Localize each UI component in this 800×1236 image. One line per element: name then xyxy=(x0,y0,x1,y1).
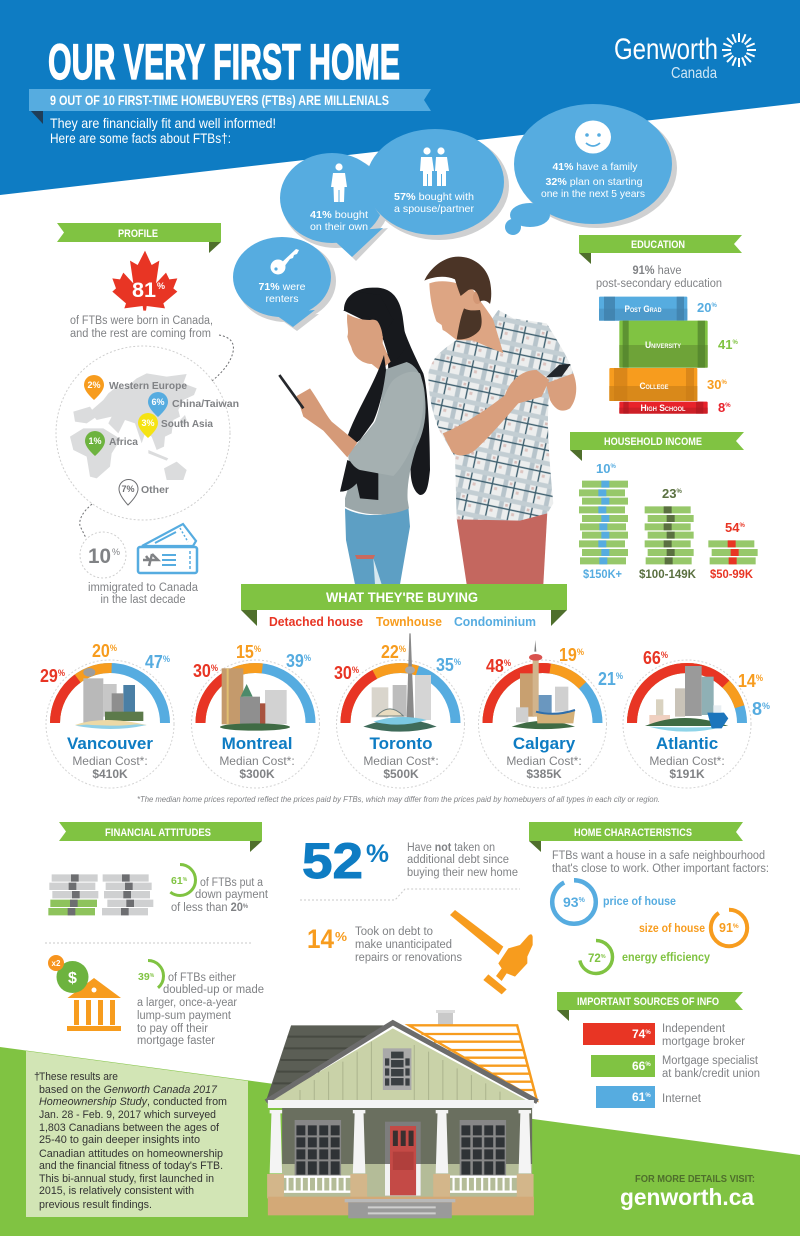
values: income percentages: 10 xyxy=(596,461,610,476)
ring: size of house 91%: % xyxy=(733,923,739,930)
bar: mortgage broker 74%: mortgage broker xyxy=(662,1036,745,1048)
bubble: renters: 71% were xyxy=(258,281,306,293)
gauge: Montreal: 30 xyxy=(193,661,213,681)
values: education percentages: % xyxy=(721,380,727,386)
gauge: Montreal xyxy=(192,642,320,788)
stat: 14% took on debt: repairs or renovations xyxy=(355,952,462,964)
ribbon: sources of info xyxy=(557,992,743,1021)
text: important factors: that's close to work. Other important factors: xyxy=(552,863,769,875)
gauge: Toronto: 22 xyxy=(381,642,401,662)
bubble: family: one in the next 5 years xyxy=(541,188,645,200)
panel: important sources of info xyxy=(557,992,760,1108)
door xyxy=(385,1122,421,1196)
gauge: Calgary: 19 xyxy=(559,645,579,665)
panel: study note: previous result findings. xyxy=(39,1199,152,1211)
bar: mortgage broker 74%: Independent xyxy=(662,1023,726,1035)
bubble: bought with a spouse: a spouse/partner xyxy=(394,203,474,215)
illustration: house xyxy=(266,1023,537,1218)
gauge: Atlantic: % xyxy=(762,701,770,711)
stat: 52% no additional debt: 52 xyxy=(302,833,363,889)
pin: Other: 7% xyxy=(121,484,135,494)
gauge: Calgary: 48 xyxy=(486,656,506,676)
intro text: They are financially fit and well informed! xyxy=(50,115,276,131)
illustration: Vancouver skyline xyxy=(75,668,147,729)
bubble: bought with a spouse xyxy=(366,129,509,240)
panel: home characteristics xyxy=(529,822,769,974)
pin: South Asia: 3% xyxy=(141,418,155,428)
bubble: family xyxy=(505,104,677,235)
gauge: Calgary: % xyxy=(577,647,584,657)
gauge: Atlantic: 66 xyxy=(643,648,663,668)
stat: 10% immigrated: 10 xyxy=(88,545,111,568)
gauge: Montreal: Montreal xyxy=(222,734,292,753)
gauge: Atlantic: % xyxy=(661,650,668,660)
panel: study note: Jan. 28 - Feb. 9, 2017 which surveyed xyxy=(39,1109,216,1121)
bubble: renters xyxy=(233,237,336,331)
gable xyxy=(266,1023,537,1103)
pin: China/Taiwan xyxy=(148,392,239,417)
values: education percentages: 20 xyxy=(697,300,711,315)
pin: Other xyxy=(119,480,169,505)
panel: debt xyxy=(300,833,533,994)
stat: 39% lump sum: mortgage faster xyxy=(137,1035,215,1047)
stat: 14% took on debt: make unanticipated xyxy=(355,939,452,951)
text: 91% post-secondary: 91% have xyxy=(632,265,682,277)
ring: energy efficiency 72%: energy efficiency xyxy=(622,952,711,964)
speech bubbles group xyxy=(233,104,677,331)
call to action: genworth.ca xyxy=(620,1184,754,1210)
stat: 39% lump sum: a larger, once-a-year xyxy=(137,997,237,1009)
logo: Genworth Canada xyxy=(614,33,756,82)
icon: baby face xyxy=(575,120,611,154)
woman xyxy=(279,288,430,584)
panel: study note: Homeownership Study, conducted from xyxy=(39,1096,227,1108)
panel: financial attitudes xyxy=(45,822,269,1047)
gauge: Vancouver: 47 xyxy=(145,652,165,672)
ribbon: profile: PROFILE xyxy=(118,228,158,240)
bar: internet 61%: 61 xyxy=(632,1090,645,1104)
panel: study note: † xyxy=(34,1071,40,1083)
stat: 14% took on debt: Took on debt to xyxy=(355,926,433,938)
bubble: bought on their own: 41% bought xyxy=(310,209,368,221)
ring: price of house 93%: 93 xyxy=(563,894,579,910)
man xyxy=(424,257,576,584)
banner: millennials xyxy=(29,89,431,124)
panel: study note: This bi-annual study, first launched in xyxy=(39,1173,214,1185)
text: important factors xyxy=(552,850,769,875)
illustration: chimney xyxy=(436,1010,455,1026)
panel: study note: 25-40 to gain deeper insights into xyxy=(39,1134,200,1146)
bar: internet 61% xyxy=(596,1086,702,1108)
bar: mortgage broker 74% xyxy=(583,1023,745,1048)
values: education percentages: % xyxy=(732,340,738,346)
illustration: Montreal skyline xyxy=(220,668,290,731)
title: OUR VERY FIRST HOME xyxy=(48,34,400,90)
panel: study note: based on the Genworth Canada 2017 xyxy=(39,1084,218,1096)
pin: Western Europe: Western Europe xyxy=(109,380,187,392)
world map xyxy=(70,373,197,480)
chart: stacked books xyxy=(599,297,708,414)
panel: study note: and the financial fitness of today's FTB. xyxy=(39,1160,223,1172)
stat: 52% no additional debt: buying their new home xyxy=(407,867,518,879)
bubble: bought with a spouse: 57% bought with xyxy=(394,191,474,203)
bar: internet 61%: % xyxy=(645,1093,651,1099)
bar: mortgage broker 74%: % xyxy=(645,1030,651,1036)
stat: 39% lump sum: lump-sum payment xyxy=(137,1010,232,1022)
chart: money stacks xyxy=(579,481,758,564)
labels: book levels: High School xyxy=(640,403,686,413)
icon: maple leaf 81% xyxy=(112,251,177,311)
values: income percentages: % xyxy=(676,489,682,495)
pin: South Asia xyxy=(138,413,213,438)
labels: income ranges: $150K+ xyxy=(583,567,622,581)
gauge: Toronto: Median Cost*: xyxy=(363,754,439,768)
pin: South Asia: South Asia xyxy=(161,418,213,430)
gauge: Toronto: % xyxy=(399,644,406,654)
illustration: Calgary skyline xyxy=(512,640,575,729)
bubble: renters: renters xyxy=(266,293,298,305)
ribbon: financial attitudes xyxy=(59,822,262,852)
icon: bank with coin: x2 xyxy=(52,959,61,968)
green footer band xyxy=(0,1047,800,1236)
gauge: Montreal: $300K xyxy=(239,767,275,781)
values: income percentages: 23 xyxy=(662,486,676,501)
stat: 61% down payment: of FTBs put a xyxy=(200,877,264,889)
heading ribbon: what they're buying: WHAT THEY'RE BUYING xyxy=(326,589,478,605)
ribbon: sources of info: IMPORTANT SOURCES OF INFO xyxy=(577,996,719,1008)
gauge: Atlantic: Atlantic xyxy=(656,734,718,753)
gauge: Calgary: $385K xyxy=(526,767,562,781)
stat: 14% took on debt: % xyxy=(335,929,347,944)
stat: 14% took on debt: 14 xyxy=(307,924,334,954)
text: 91% post-secondary xyxy=(596,265,722,290)
bar: mortgage specialist 66%: at bank/credit union xyxy=(662,1068,760,1080)
stat: 39% lump sum: to pay off their xyxy=(137,1023,208,1035)
icon: maple leaf 81%: % xyxy=(157,281,165,291)
stat: 39% lump sum: 39 xyxy=(138,971,150,983)
gauge: Montreal: 15 xyxy=(236,642,256,662)
labels: income ranges: $50-99K xyxy=(710,567,753,581)
gauge: Calgary xyxy=(478,640,623,788)
gauge: Atlantic: 14 xyxy=(738,671,758,691)
gauge: Vancouver: 20 xyxy=(92,641,112,661)
gauge: Montreal: % xyxy=(304,653,311,663)
right roof: wireframe xyxy=(409,1025,537,1100)
ribbon: home characteristics xyxy=(529,822,743,852)
labels: book levels xyxy=(624,304,686,413)
stat: 39% lump sum: % xyxy=(150,973,155,979)
heading ribbon: what they're buying xyxy=(241,584,567,626)
values: income percentages: 54 xyxy=(725,520,739,535)
stat: 61% down payment: down payment xyxy=(195,889,269,901)
text: important factors: FTBs want a house in a safe neighbourhood xyxy=(552,850,765,862)
illustration: Atlantic skyline xyxy=(645,666,728,732)
blue header band xyxy=(0,0,800,195)
gauge: Vancouver: % xyxy=(163,654,170,664)
gauge: Vancouver: % xyxy=(58,668,65,678)
intro text: Here are some facts about FTBs†: xyxy=(50,130,231,146)
call to action: FOR MORE DETAILS VISIT: xyxy=(635,1174,755,1185)
panel: study note: Canadian attitudes on homeownership xyxy=(39,1148,223,1160)
ribbon: profile xyxy=(57,223,221,253)
ribbon: financial attitudes: FINANCIAL ATTITUDES xyxy=(105,827,211,839)
bubble: family: 41% have a family xyxy=(552,161,638,173)
gauge: Vancouver: 29 xyxy=(40,666,60,686)
gauge: Atlantic: $191K xyxy=(669,767,705,781)
pin: China/Taiwan: 6% xyxy=(151,397,165,407)
gauge: Atlantic xyxy=(623,648,770,788)
pin: China/Taiwan: China/Taiwan xyxy=(172,398,239,410)
stat: 10% immigrated xyxy=(80,524,199,606)
icon: hammer xyxy=(450,910,533,994)
ring: size of house 91% xyxy=(639,910,747,946)
gauge: Toronto: 35 xyxy=(436,655,456,675)
ribbon: household income xyxy=(570,432,744,461)
panel: study note: 1,803 Canadians between the ages of xyxy=(39,1122,220,1134)
stat: 61% down payment: 61 xyxy=(171,875,183,887)
labels: book levels: College xyxy=(640,381,668,391)
ribbon: home characteristics: HOME CHARACTERISTICS xyxy=(574,827,692,839)
pin: Western Europe xyxy=(84,375,187,400)
gauge: Montreal: Median Cost*: xyxy=(219,754,295,768)
stat: 61% down payment: % xyxy=(183,877,188,883)
bar: mortgage specialist 66%: % xyxy=(645,1062,651,1068)
gauge: Toronto: $500K xyxy=(383,767,419,781)
gauge: Toronto: 30 xyxy=(334,663,354,683)
values: income percentages: % xyxy=(739,523,745,529)
legend: home types: Condominium xyxy=(454,614,536,629)
values: education percentages: 8 xyxy=(718,400,725,415)
panel: education xyxy=(579,235,742,415)
stat: 52% no additional debt: Have not taken on xyxy=(407,842,495,854)
labels: book levels: University xyxy=(645,340,681,350)
ring: price of house 93%: % xyxy=(579,897,586,904)
stat: 39% lump sum: doubled-up or made xyxy=(163,984,264,996)
gauge: Calgary: Median Cost*: xyxy=(506,754,582,768)
beam xyxy=(268,1100,534,1108)
banner: millennials: 9 OUT OF 10 FIRST-TIME HOMEBUYERS (FTBs) ARE MILLENIALS xyxy=(50,92,389,108)
stat: 10% immigrated: immigrated to Canada xyxy=(88,582,199,594)
stat: 14% took on debt xyxy=(307,924,462,964)
values: education percentages: % xyxy=(711,303,717,309)
pin: Africa: Africa xyxy=(109,436,138,448)
stat: 52% no additional debt xyxy=(302,833,518,889)
columns xyxy=(267,1110,534,1198)
icon: plane tickets xyxy=(138,524,197,573)
gauge: Toronto: % xyxy=(454,657,461,667)
values: income percentages: % xyxy=(610,464,616,470)
ribbon: education: EDUCATION xyxy=(631,239,685,251)
icon: money stacks down payment xyxy=(48,874,153,915)
bubble: bought on their own xyxy=(280,153,390,261)
stat: 39% lump sum xyxy=(132,960,264,1047)
bubble: family: 32% plan on starting xyxy=(546,176,643,188)
values: education percentages: % xyxy=(725,403,731,409)
icon: bank with coin: $ xyxy=(68,970,77,987)
ribbon: household income: HOUSEHOLD INCOME xyxy=(604,436,702,448)
values: income percentages xyxy=(596,461,745,535)
stat: 52% no additional debt: additional debt since xyxy=(407,854,509,866)
stat: 52% no additional debt: % xyxy=(366,840,389,868)
ring: size of house 91%: size of house xyxy=(639,923,705,935)
icon: maple leaf 81%: 81 xyxy=(132,279,156,302)
intro text xyxy=(50,115,276,146)
panel: study note xyxy=(26,1051,248,1217)
railings xyxy=(284,1177,518,1192)
legend: home types: Townhouse xyxy=(376,614,442,629)
porch wall xyxy=(282,1107,532,1199)
bar: mortgage specialist 66%: Mortgage specialist xyxy=(662,1055,759,1067)
icon: key xyxy=(270,249,299,274)
ring: price of house 93%: price of house xyxy=(603,896,676,908)
bar: mortgage broker 74%: 74 xyxy=(632,1027,645,1041)
gauge: Montreal: % xyxy=(254,644,261,654)
gauge: Vancouver: Median Cost*: xyxy=(72,754,148,768)
stat: 10% immigrated: in the last decade xyxy=(100,594,186,606)
gauge: Atlantic: % xyxy=(756,673,763,683)
labels: book levels: Post Grad xyxy=(624,304,662,314)
stat: 39% lump sum: of FTBs either xyxy=(168,972,236,984)
stat: 61% down payment xyxy=(164,864,269,914)
bar: mortgage specialist 66%: 66 xyxy=(632,1059,645,1073)
stat: 61% down payment: of less than 20 xyxy=(171,902,243,914)
legend: home types xyxy=(269,614,536,629)
gauge: Toronto xyxy=(334,633,464,788)
panel: profile xyxy=(56,223,239,606)
gauge: Atlantic: Median Cost*: xyxy=(649,754,725,768)
gauge: Toronto: Toronto xyxy=(370,734,432,753)
stat: 61% down payment: % xyxy=(243,904,249,910)
bar: mortgage specialist 66% xyxy=(591,1055,760,1080)
gauge: Vancouver xyxy=(40,641,174,788)
ribbon: education xyxy=(579,235,742,264)
illustration: Toronto skyline xyxy=(363,633,437,732)
values: education percentages: 41 xyxy=(718,337,732,352)
values: education percentages xyxy=(697,300,738,415)
foundation xyxy=(268,1197,534,1215)
gauge: Calgary: % xyxy=(616,671,623,681)
gauge: Toronto: % xyxy=(352,665,359,675)
gauge: Montreal: 39 xyxy=(286,651,306,671)
text: born in Canada: and the rest are coming from xyxy=(70,328,211,340)
logo: Genworth Canada: Genworth xyxy=(614,33,718,66)
gauge: Vancouver: % xyxy=(110,643,117,653)
footnote: median price: *The median home prices reported reflect the prices paid by FTBs, which may differ from the prices paid by homebuyers of all types in each city or region. xyxy=(137,794,660,804)
text: born in Canada: of FTBs were born in Canada, xyxy=(70,315,213,327)
pin: Africa: 1% xyxy=(88,436,102,446)
panel: study note: 2015, is relatively consistent with xyxy=(39,1185,194,1197)
left roof xyxy=(266,1025,384,1101)
pin: Africa xyxy=(85,431,138,456)
panel: household income xyxy=(570,432,758,581)
labels: income ranges: $100-149K xyxy=(639,567,696,581)
ring: energy efficiency 72% xyxy=(580,940,711,974)
logo: Genworth Canada: Canada xyxy=(671,65,717,82)
photo: woman and man on phones xyxy=(279,257,576,584)
front steps xyxy=(345,1199,455,1218)
gauge: Atlantic: 8 xyxy=(752,699,762,719)
bubble: bought on their own: on their own xyxy=(310,221,368,233)
ring: price of house 93% xyxy=(552,880,676,924)
legend: home types: Detached house xyxy=(269,614,363,629)
labels: income ranges xyxy=(583,567,753,581)
panel: study note: These results are xyxy=(39,1071,118,1083)
stat: 10% immigrated: % xyxy=(112,547,120,557)
ring: energy efficiency 72%: % xyxy=(601,954,606,960)
text: born in Canada xyxy=(70,315,213,340)
gauge: Montreal: % xyxy=(211,663,218,673)
gauge: Calgary: 21 xyxy=(598,669,618,689)
gauge: Calgary: Calgary xyxy=(513,734,576,753)
pin: Western Europe: 2% xyxy=(87,380,101,390)
gauge: Calgary: % xyxy=(504,658,511,668)
icon: bank with coin xyxy=(48,955,121,1031)
pin: Other: Other xyxy=(141,484,169,496)
ring: size of house 91%: 91 xyxy=(719,921,733,935)
text: 91% post-secondary: post-secondary education xyxy=(596,278,722,290)
bar: internet 61%: Internet xyxy=(662,1093,702,1105)
gauge: Vancouver: Vancouver xyxy=(67,734,153,753)
gauge: Vancouver: $410K xyxy=(92,767,128,781)
values: education percentages: 30 xyxy=(707,377,721,392)
ring: energy efficiency 72%: 72 xyxy=(588,953,601,965)
